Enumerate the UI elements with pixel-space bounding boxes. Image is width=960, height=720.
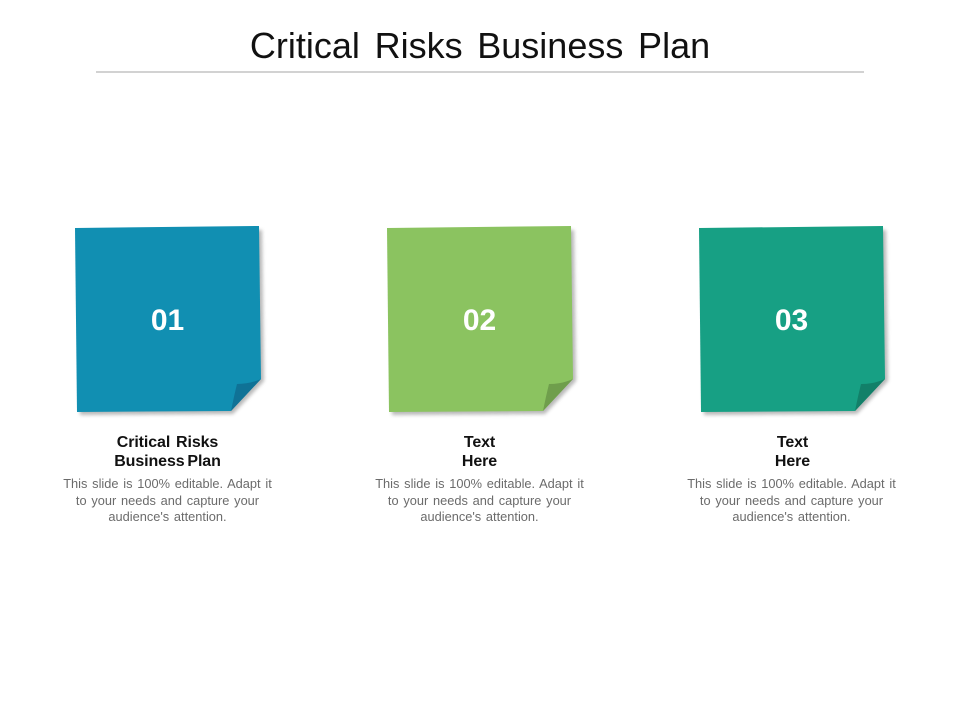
icon: folded corner 02 xyxy=(543,379,573,411)
text block 02: This slide is 100% editable. Adapt it xyxy=(375,476,584,491)
number 02: 02 xyxy=(463,304,496,337)
number 01: 01 xyxy=(151,304,184,337)
heading 02: Here xyxy=(462,453,497,470)
text block 03: This slide is 100% editable. Adapt it xyxy=(687,476,896,491)
heading 03: Text xyxy=(777,434,808,451)
heading 01 xyxy=(114,434,221,470)
note 02 xyxy=(387,226,576,415)
text block 03 xyxy=(687,476,896,524)
note 03 xyxy=(699,226,888,415)
text block 03: audience's attention. xyxy=(732,509,851,524)
icon: folded corner 03 xyxy=(855,379,885,411)
note 01 xyxy=(75,226,264,415)
heading 02 xyxy=(462,434,497,470)
heading 03: Here xyxy=(775,453,810,470)
title: Critical Risks Business Plan xyxy=(250,25,710,66)
text block 02 xyxy=(375,476,584,524)
icon: folded corner 01 xyxy=(231,379,261,411)
heading 01: Business Plan xyxy=(114,453,221,470)
text block 01: This slide is 100% editable. Adapt it xyxy=(63,476,272,491)
heading 02: Text xyxy=(464,434,495,451)
text block 03: to your needs and capture your xyxy=(700,492,883,508)
text block 02: audience's attention. xyxy=(420,509,539,524)
number 03: 03 xyxy=(775,304,808,337)
text block 02: to your needs and capture your xyxy=(388,492,571,508)
text block 01: audience's attention. xyxy=(108,509,227,524)
heading 03 xyxy=(775,434,810,470)
text block 01: to your needs and capture your xyxy=(76,492,259,508)
heading 01: Critical Risks xyxy=(117,434,218,451)
text block 01 xyxy=(63,476,272,524)
